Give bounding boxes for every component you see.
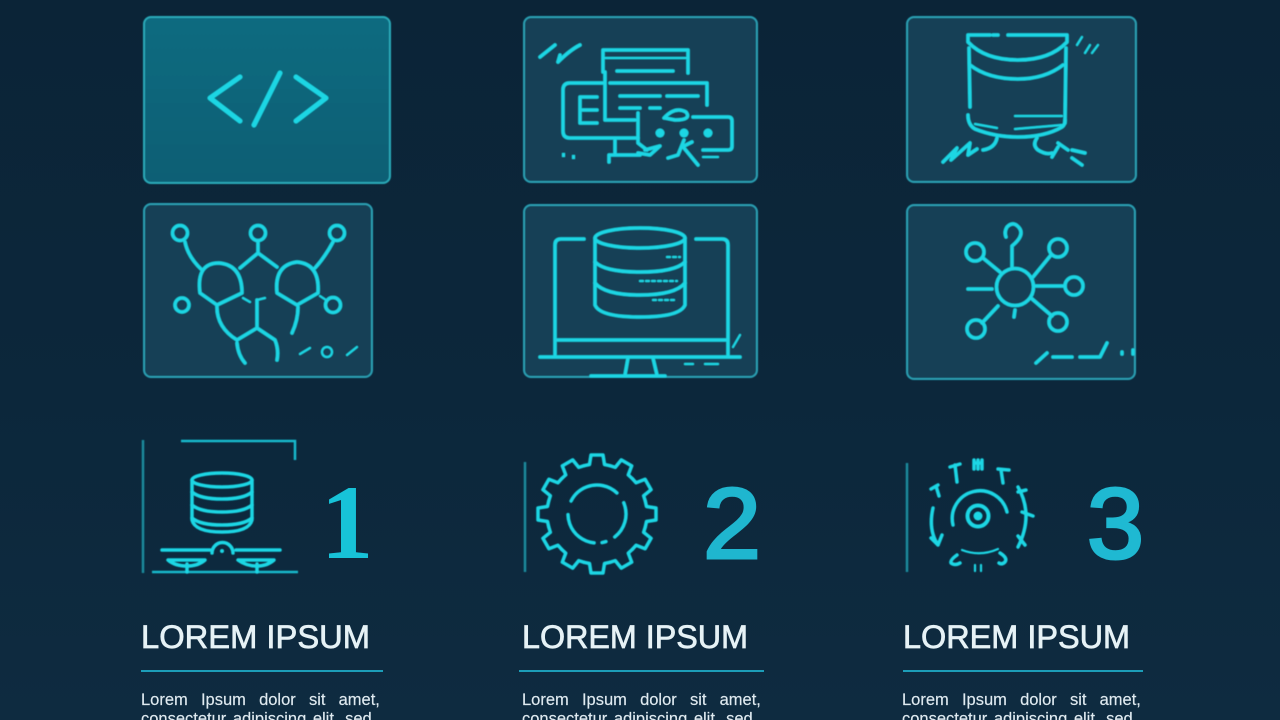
body text — [141, 691, 380, 720]
icon: windows and people — [540, 45, 732, 165]
heading: LOREM IPSUM — [522, 619, 748, 655]
panel: hub network — [907, 205, 1135, 379]
heading: LOREM IPSUM — [903, 619, 1130, 655]
panel: windows and team — [524, 17, 757, 182]
divider — [141, 670, 383, 672]
number 2: 2 — [703, 468, 761, 580]
number 1: 1 — [320, 464, 374, 581]
column 1: step one — [141, 440, 383, 720]
icon: hub and spokes — [966, 224, 1133, 363]
panel: code — [144, 17, 390, 183]
icon: people heads — [562, 128, 712, 159]
body text: Lorem Ipsum dolor sit amet, — [141, 691, 380, 709]
body text — [522, 691, 761, 720]
icon frame: database scale — [143, 440, 298, 573]
panel: storage cylinder — [907, 17, 1136, 182]
divider — [903, 670, 1143, 672]
number 3: 3 — [1087, 468, 1144, 580]
body text: Lorem Ipsum dolor sit amet, — [902, 691, 1141, 709]
panel: database on laptop — [524, 205, 757, 377]
panel: molecule network — [144, 204, 372, 377]
icon: gear — [525, 455, 656, 573]
divider — [519, 670, 764, 672]
column 3: step three — [902, 460, 1144, 720]
icon: storage cylinder — [943, 35, 1098, 165]
icon: code brackets — [210, 73, 326, 125]
icon: molecule — [172, 226, 357, 363]
column 2: step two — [519, 455, 764, 720]
icon: database laptop — [540, 228, 740, 376]
icon: target dial — [907, 460, 1033, 572]
icon: database on balance — [162, 473, 280, 572]
body text: Lorem Ipsum dolor sit amet, — [522, 691, 761, 709]
heading: LOREM IPSUM — [141, 619, 370, 655]
body text — [902, 691, 1141, 720]
